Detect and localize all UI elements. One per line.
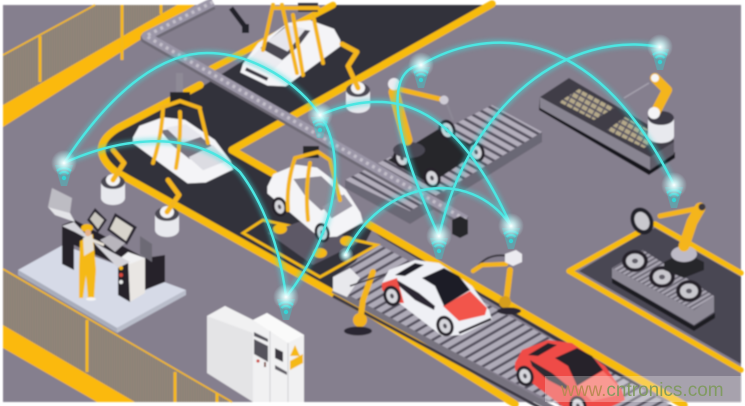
gantry: centre car bbox=[288, 146, 340, 220]
battery tray bbox=[539, 78, 675, 175]
control console bbox=[48, 188, 165, 302]
gantry: top car bbox=[263, 3, 323, 75]
robot: tray arm bbox=[624, 74, 674, 143]
fence: bottom left bbox=[3, 269, 232, 402]
fence: top left bbox=[3, 5, 195, 127]
gantry: left car bbox=[153, 73, 208, 168]
yellow diamond zone and platform bbox=[243, 218, 377, 277]
car: red on conveyor bbox=[513, 340, 625, 406]
watermark box bbox=[545, 376, 741, 402]
worker bbox=[79, 224, 104, 301]
car: top assembly bbox=[240, 20, 340, 86]
car roller conveyor bbox=[333, 245, 680, 406]
wifi nodes bbox=[51, 34, 687, 320]
overhead rail bbox=[146, 2, 466, 222]
robot: tyre arm bbox=[626, 204, 706, 278]
centre roller conveyor bbox=[345, 105, 542, 224]
tyre zone bbox=[569, 224, 741, 370]
black cube at rail end bbox=[452, 216, 468, 238]
dark assembly lane bbox=[105, 5, 660, 402]
hanging tool top bbox=[231, 8, 249, 33]
robot: centre yellow arm bbox=[388, 78, 453, 158]
car: centre assembly bbox=[267, 165, 363, 245]
robot: camera arm bbox=[473, 250, 522, 315]
electrical cabinets bbox=[207, 306, 304, 402]
robot: welding arm bbox=[344, 272, 385, 336]
chassis on centre conveyor bbox=[388, 117, 488, 191]
car: left assembly bbox=[133, 117, 233, 183]
yellow lane markings bbox=[101, 4, 684, 405]
car: white and red on conveyor bbox=[380, 260, 492, 339]
watermark text: www.cntronics.com bbox=[560, 380, 724, 401]
tyre conveyor bbox=[612, 250, 715, 331]
small robot arms with white bases bbox=[101, 44, 370, 237]
control station platform bbox=[18, 245, 186, 333]
wireless arcs bbox=[64, 43, 674, 296]
